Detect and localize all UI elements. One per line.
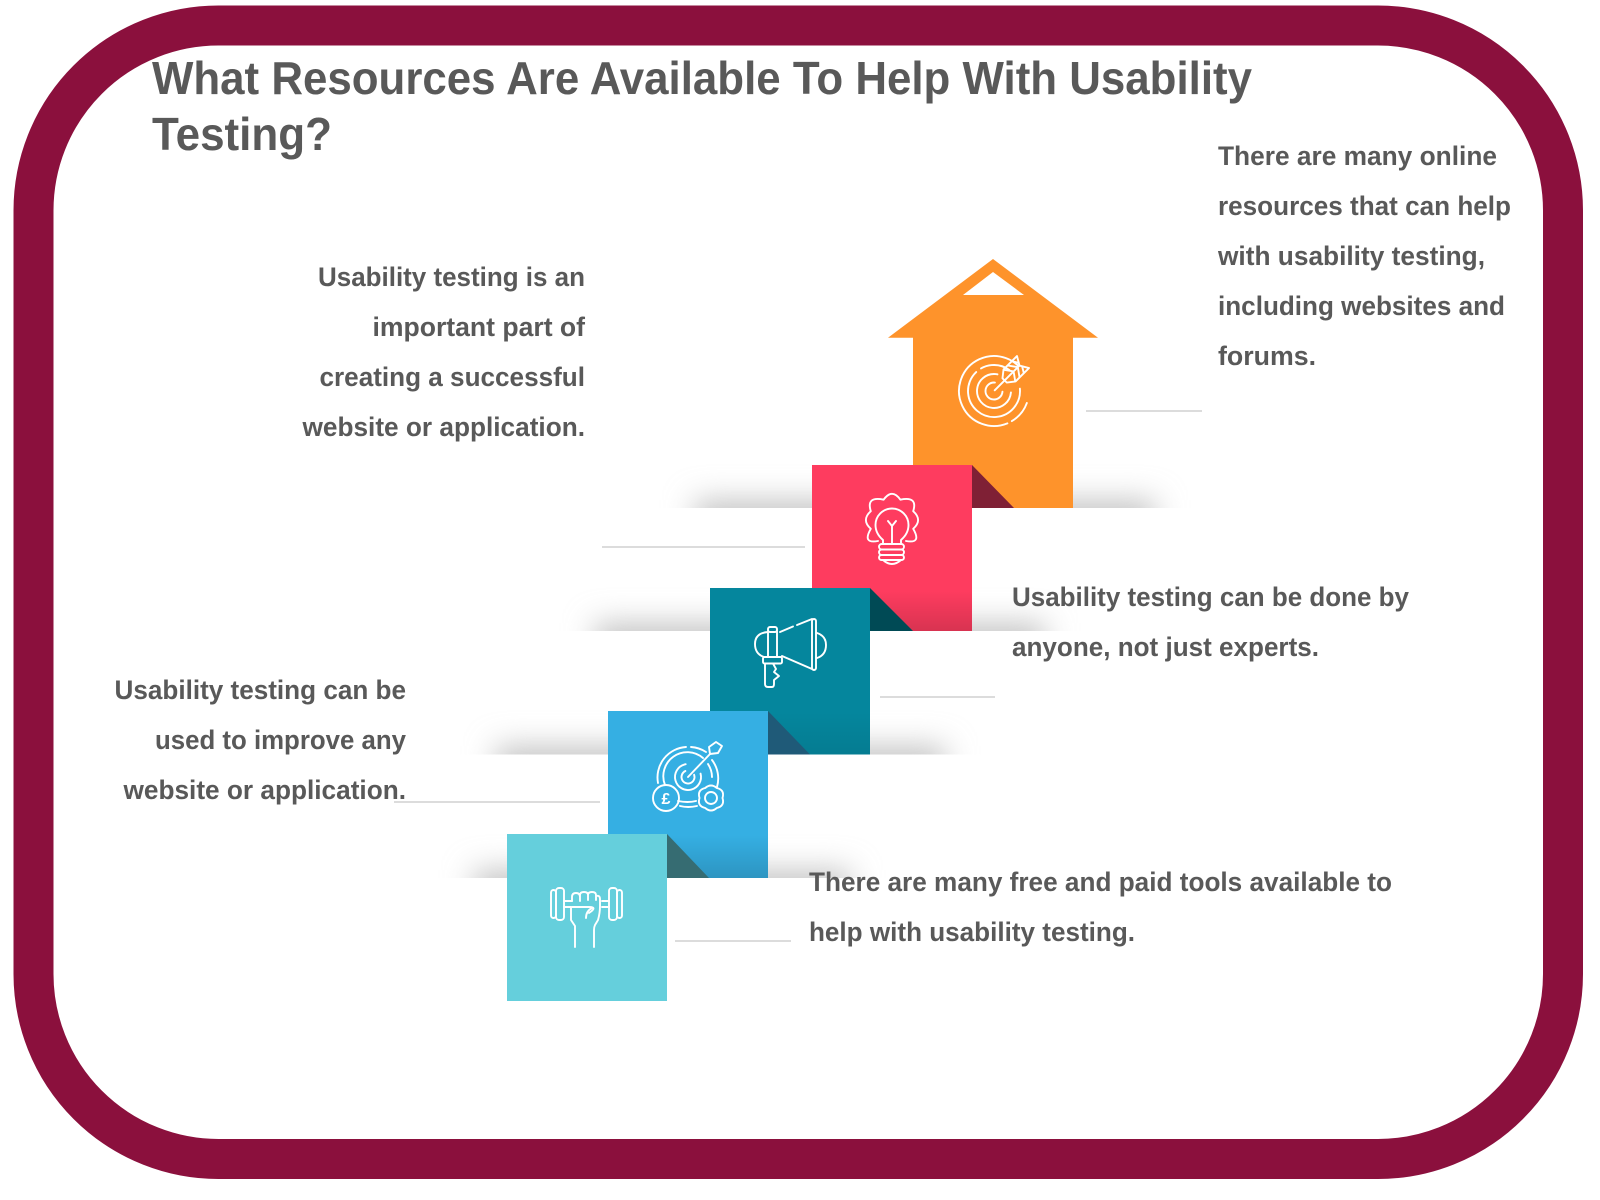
square — [710, 588, 870, 754]
icon: target with pound and gear — [653, 742, 723, 811]
text block: online resources: including websites and — [1218, 291, 1505, 321]
icon label: pound sign: £ — [662, 791, 671, 808]
fold — [667, 834, 709, 878]
connector line: step 1 — [675, 940, 791, 942]
fold — [768, 711, 810, 754]
text block: important part — [302, 262, 586, 442]
text block: online resources: There are many online — [1218, 141, 1497, 171]
step 2: blue square — [608, 711, 768, 878]
text block: improve any website: used to improve any — [155, 725, 406, 755]
text block: online resources: resources that can help — [1218, 191, 1511, 221]
text block: important part: Usability testing is an — [318, 262, 585, 292]
square — [608, 711, 768, 878]
fold — [972, 465, 1014, 508]
text block: done by anyone: anyone, not just experts. — [1012, 632, 1319, 662]
step 3: teal square — [710, 588, 870, 754]
text block: free and paid tools: There are many free and paid tools available to — [809, 867, 1392, 897]
text block: done by anyone — [1012, 582, 1409, 662]
icon: fist with dumbbell — [551, 888, 622, 947]
icon: target with arrow — [949, 346, 1039, 436]
text block: free and paid tools: help with usability testing. — [809, 917, 1135, 947]
text block: online resources: with usability testing, — [1217, 241, 1485, 271]
text block: improve any website: website or application. — [123, 775, 406, 805]
icon: light bulb in gear — [866, 494, 918, 564]
text block: improve any website: Usability testing can be — [114, 675, 406, 705]
connector line: step 2 — [394, 801, 600, 803]
text block: important part: creating a successful — [320, 362, 585, 392]
fold — [870, 588, 913, 631]
text block: important part: website or application. — [302, 412, 585, 442]
square — [507, 834, 667, 1001]
text block: online resources: forums. — [1218, 341, 1316, 371]
house shape — [888, 259, 1098, 508]
text block: improve any website — [114, 675, 406, 805]
text block: important part: important part of — [372, 312, 586, 342]
text block: done by anyone: Usability testing can be done by — [1012, 582, 1409, 612]
text block: online resources — [1217, 141, 1511, 371]
step 5: orange house — [888, 259, 1098, 508]
connector line: step 4 — [602, 546, 805, 548]
icon: megaphone — [755, 619, 826, 687]
text block: free and paid tools — [809, 867, 1392, 947]
title: Testing? — [152, 108, 332, 160]
title — [152, 52, 1252, 160]
step 1: cyan square — [507, 834, 667, 1001]
connector line: step 5 — [1086, 410, 1202, 412]
step 4: red square — [812, 465, 972, 631]
square — [812, 465, 972, 631]
connector line: step 3 — [880, 696, 995, 698]
title: What Resources Are Available To Help With Usability — [152, 52, 1252, 104]
